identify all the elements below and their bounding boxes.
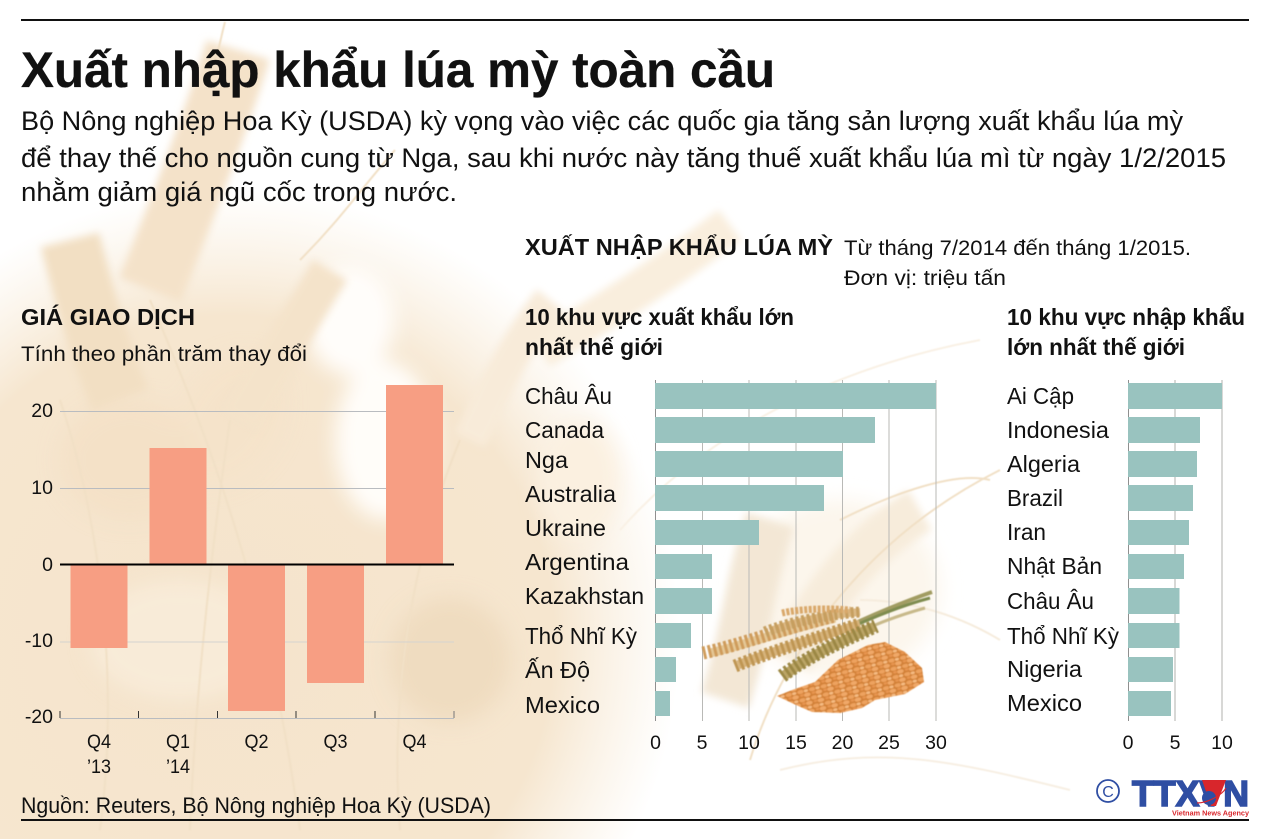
background wheat ears — [70, 50, 920, 700]
heading: price: GIÁ GIAO DỊCH — [21, 303, 195, 330]
x axis labels: exporters: 0 — [650, 732, 661, 754]
x axis labels: Q1 — [166, 732, 190, 753]
grid lines — [656, 380, 936, 721]
panel: importers chart — [1007, 304, 1245, 754]
labels: exporters — [525, 383, 644, 718]
bars: price — [70, 385, 443, 711]
section note: trade: Từ tháng 7/2014 đến tháng 1/2015. — [844, 236, 1191, 260]
bars: importers — [1128, 383, 1222, 716]
x axis labels: Q2 — [244, 732, 268, 753]
labels: importers: Algeria — [1007, 451, 1080, 477]
x axis labels: exporters: 10 — [738, 732, 760, 754]
heading: exporters: nhất thế giới — [525, 334, 663, 360]
x axis labels: exporters: 15 — [785, 732, 807, 754]
labels: exporters: Argentina — [525, 549, 629, 575]
x axis labels: exporters: 5 — [697, 732, 708, 754]
x axis labels: Q4 — [402, 732, 427, 753]
labels: exporters: Canada — [525, 417, 604, 443]
heading: importers — [1007, 304, 1245, 360]
labels: exporters: Ukraine — [525, 515, 606, 541]
x axis labels: exporters — [650, 732, 947, 754]
top rule — [21, 19, 1249, 21]
y axis labels: -20 — [25, 706, 53, 728]
labels: importers: Mexico — [1007, 690, 1082, 716]
x axis labels: exporters: 30 — [925, 732, 947, 754]
x axis labels: exporters: 25 — [878, 732, 900, 754]
grid lines — [1128, 380, 1222, 721]
heading: exporters — [525, 304, 794, 360]
x axis labels: ’13 — [87, 757, 111, 778]
intro text: nhằm giảm giá ngũ cốc trong nước. — [21, 176, 457, 207]
y axis grid lines — [60, 412, 454, 718]
x axis labels: importers: 0 — [1123, 732, 1134, 754]
logo: TTXVN: C — [1102, 784, 1114, 801]
illustration: wheat ears and grain pile — [703, 592, 932, 713]
title: Xuất nhập khẩu lúa mỳ toàn cầu — [21, 42, 775, 98]
labels: exporters: Nga — [525, 447, 568, 473]
labels: importers: Thổ Nhĩ Kỳ — [1007, 623, 1119, 649]
heading: importers: 10 khu vực nhập khẩu — [1007, 304, 1245, 330]
subheading: price: Tính theo phần trăm thay đổi — [21, 342, 307, 366]
heading: exporters: 10 khu vực xuất khẩu lớn — [525, 304, 794, 330]
y axis labels: 10 — [31, 477, 53, 499]
logo: TTXVN: Vietnam News Agency — [1172, 808, 1250, 818]
x axis labels: Q4 — [87, 732, 111, 753]
x axis labels: ’14 — [166, 757, 190, 778]
panel: price change chart — [21, 303, 454, 778]
x axis labels: importers: 10 — [1211, 732, 1233, 754]
labels: exporters: Mexico — [525, 692, 600, 718]
zero axis — [60, 564, 454, 566]
x axis labels — [87, 732, 427, 778]
bars: exporters — [655, 383, 936, 716]
x axis labels: exporters: 20 — [832, 732, 853, 754]
x axis labels: importers — [1123, 732, 1233, 754]
labels: importers: Ai Cập — [1007, 383, 1074, 409]
labels: exporters: Thổ Nhĩ Kỳ — [525, 623, 637, 649]
x axis labels: Q3 — [324, 732, 348, 753]
bottom rule — [21, 819, 1249, 821]
heading: importers: lớn nhất thế giới — [1007, 334, 1185, 360]
y axis labels: -10 — [25, 630, 53, 652]
labels: exporters: Ấn Độ — [525, 656, 590, 683]
labels: exporters: Australia — [525, 481, 616, 507]
labels: importers: Indonesia — [1007, 417, 1109, 443]
section note: trade: Đơn vị: triệu tấn — [844, 266, 1006, 290]
logo: TTXVN: TTXVN — [1132, 773, 1249, 814]
x axis labels: importers: 5 — [1170, 732, 1181, 754]
labels: importers — [1007, 383, 1119, 716]
labels: exporters: Kazakhstan — [525, 583, 644, 609]
intro text — [21, 106, 1226, 207]
y axis labels: 20 — [31, 400, 53, 422]
intro text: để thay thế cho nguồn cung từ Nga, sau khi nước này tăng thuế xuất khẩu lúa mì từ ngày 1/2/2015 — [21, 143, 1226, 173]
y axis labels: 0 — [42, 554, 53, 576]
intro text: Bộ Nông nghiệp Hoa Kỳ (USDA) kỳ vọng vào việc các quốc gia tăng sản lượng xuất khẩu lúa mỳ — [21, 106, 1183, 136]
labels: exporters: Châu Âu — [525, 383, 612, 409]
labels: importers: Châu Âu — [1007, 588, 1094, 614]
labels: importers: Iran — [1007, 519, 1046, 545]
y axis labels — [25, 400, 53, 728]
labels: importers: Nhật Bản — [1007, 553, 1102, 579]
panel: exporters chart — [525, 304, 947, 754]
section heading: trade: XUẤT NHẬP KHẨU LÚA MỲ — [525, 233, 833, 260]
labels: importers: Brazil — [1007, 485, 1063, 511]
source: Nguồn: Reuters, Bộ Nông nghiệp Hoa Kỳ (USDA) — [21, 793, 491, 818]
labels: importers: Nigeria — [1007, 656, 1082, 682]
section note: trade — [844, 236, 1191, 290]
